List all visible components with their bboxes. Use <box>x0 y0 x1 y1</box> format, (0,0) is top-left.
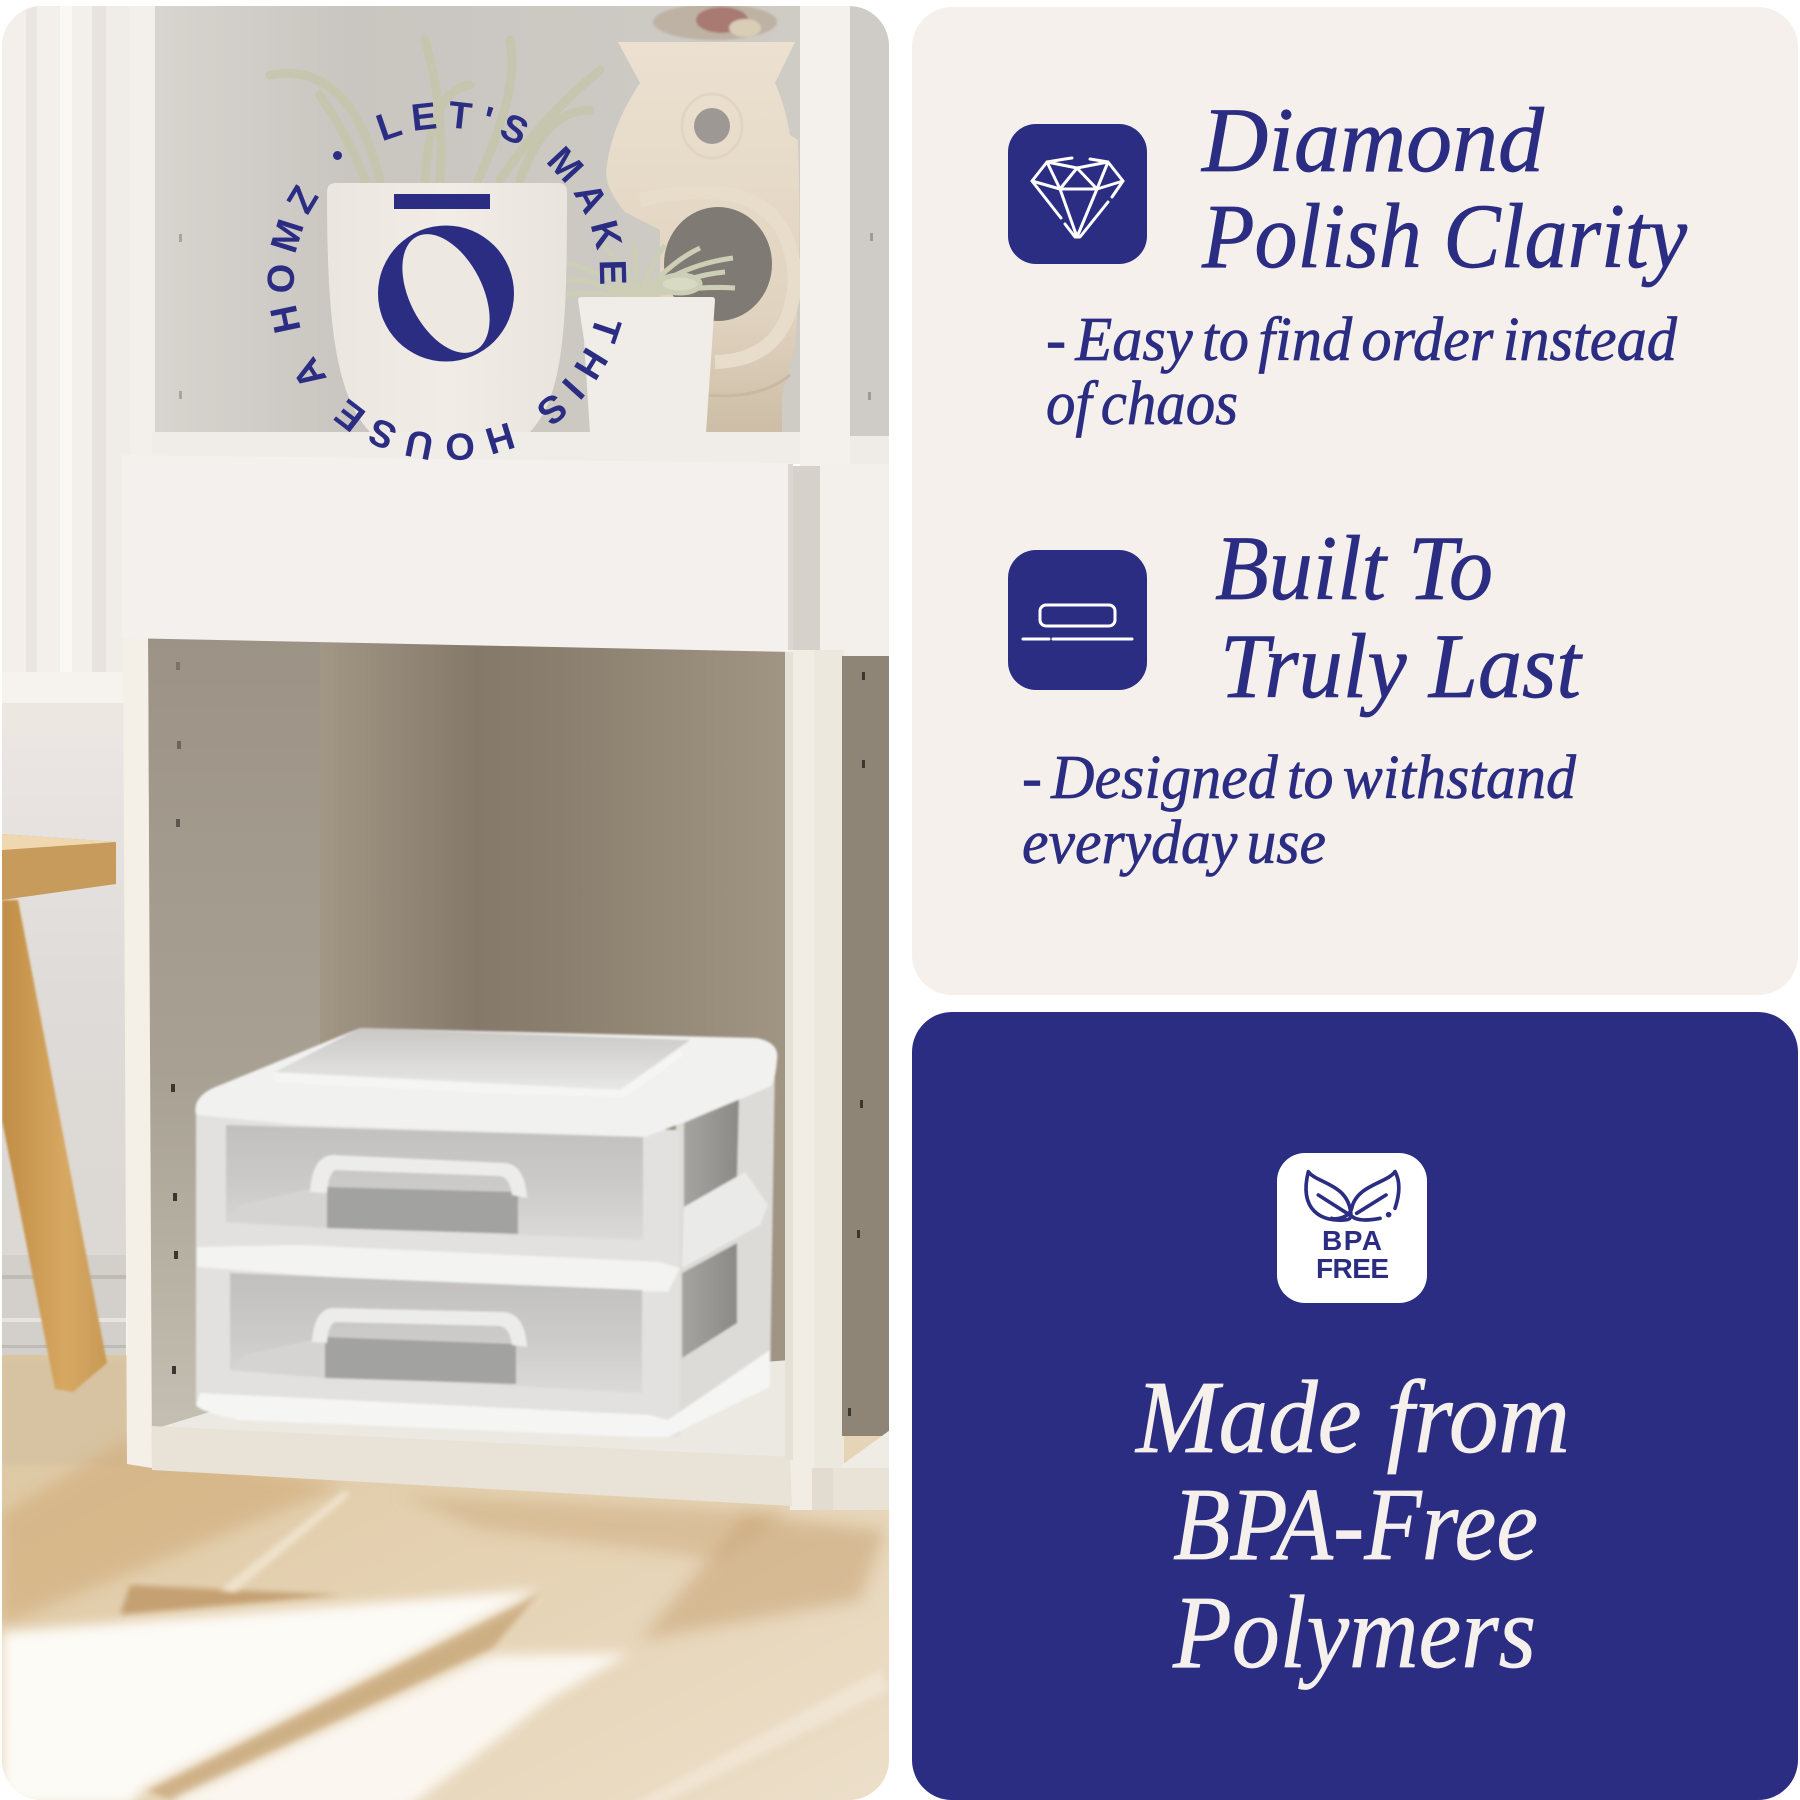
base rim <box>196 1350 770 1437</box>
bottom drawer window <box>230 1273 642 1393</box>
top drawer window <box>226 1125 643 1240</box>
wooden floor <box>0 1355 900 1800</box>
heading: diamond polish clarity <box>1200 89 1687 287</box>
heading: diamond polish clarity: Diamond <box>1200 89 1545 191</box>
text: designed to withstand <box>1022 744 1577 877</box>
big pot <box>327 183 567 432</box>
text: easy to find order <box>1046 306 1678 438</box>
small plant tuft <box>560 240 735 298</box>
panel: product photo <box>0 0 900 1800</box>
plant leaves <box>270 40 600 180</box>
text: easy to find order: of chaos <box>1046 370 1238 438</box>
dried flowers <box>653 4 777 40</box>
right cabinet column <box>790 0 895 1510</box>
top surface <box>195 1028 777 1137</box>
logo badge <box>267 101 626 460</box>
table <box>2 834 116 1392</box>
heading: diamond polish clarity: Polish Clarity <box>1201 185 1687 287</box>
shelf and white board <box>122 432 800 652</box>
dot <box>333 151 342 160</box>
icon: flat lid <box>1008 550 1147 690</box>
heading: made from BPA-free polymers: BPA-Free <box>1173 1467 1538 1582</box>
heading: built to truly last: Built To <box>1215 517 1493 619</box>
text: easy to find order: - Easy to find order instead <box>1046 306 1678 374</box>
heading: made from BPA-free polymers <box>1134 1360 1570 1690</box>
vase <box>606 42 799 433</box>
icon: BPA free leaves <box>1277 1153 1427 1303</box>
heading: made from BPA-free polymers: Made from <box>1134 1360 1570 1475</box>
circular text: LET'S MAKE THIS HOUSE A HOMZ <box>267 101 626 460</box>
panel: features <box>912 7 1798 995</box>
panel: BPA free <box>912 1012 1798 1800</box>
bottom drawer handle <box>312 1308 527 1347</box>
wall and curtain <box>0 0 160 1360</box>
text: designed to withstand: - Designed to withstand <box>1022 744 1577 812</box>
upper shelf niche <box>130 0 800 440</box>
front frame <box>196 1115 680 1437</box>
small pot <box>578 297 715 433</box>
middle rim <box>197 1245 680 1292</box>
text: designed to withstand: everyday use <box>1022 809 1326 877</box>
plastic drawer unit <box>195 1028 777 1437</box>
icon: BPA free leaves: BPA <box>1322 1225 1382 1256</box>
heading: built to truly last <box>1215 517 1583 717</box>
shelf holes <box>171 233 873 1416</box>
icon: BPA free leaves: FREE <box>1316 1253 1389 1284</box>
top drawer handle <box>310 1155 527 1198</box>
heading: built to truly last: Truly Last <box>1220 615 1583 717</box>
lower cabinet <box>123 233 873 1506</box>
heading: made from BPA-free polymers: Polymers <box>1172 1575 1536 1690</box>
icon: diamond <box>1008 124 1147 264</box>
side of unit <box>674 1077 776 1410</box>
logo mark <box>378 194 514 367</box>
